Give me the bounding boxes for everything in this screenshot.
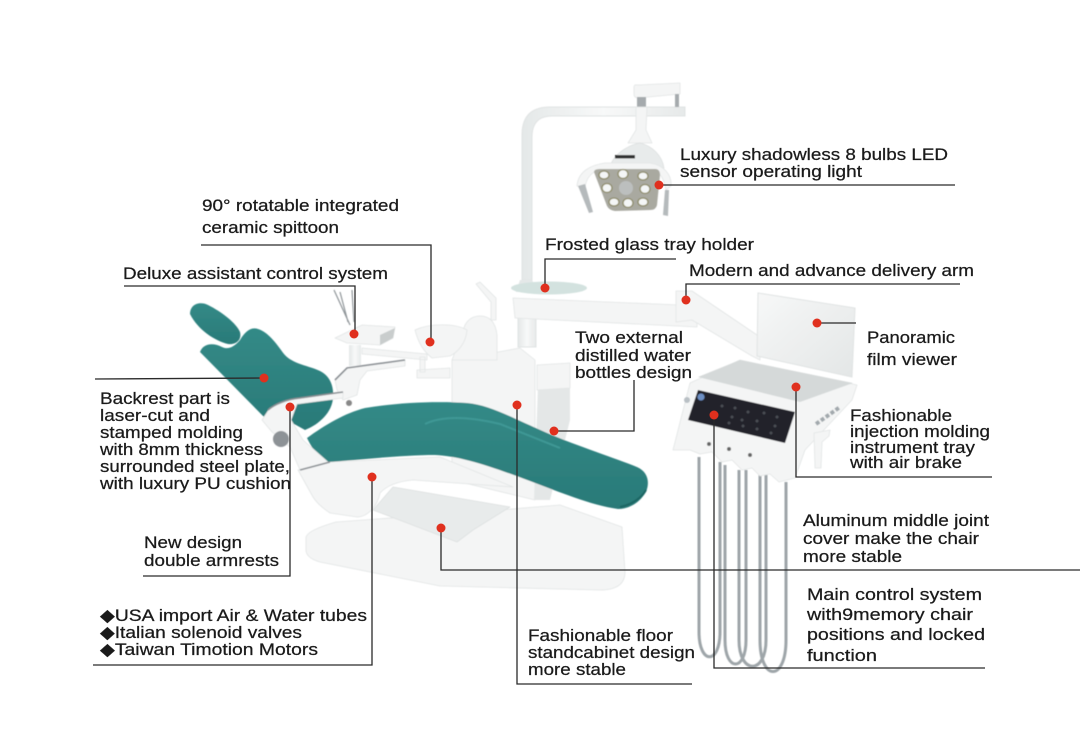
label: backrest: Backrest part is <box>100 389 230 408</box>
label: armrests: double armrests <box>144 551 279 570</box>
label: instrument tray <box>849 406 990 472</box>
label: components list <box>100 606 367 659</box>
label: water bottles <box>575 328 692 382</box>
label: backrest: laser-cut and <box>100 406 210 425</box>
label: operating light: Luxury shadowless 8 bulbs LED <box>680 145 948 164</box>
leader: armrests <box>143 402 294 576</box>
label: operating light <box>680 145 948 181</box>
label: glass tray: Frosted glass tray holder <box>545 235 754 254</box>
spittoon and faucet <box>415 282 497 360</box>
label: water bottles: Two external <box>575 328 683 347</box>
leader: main control <box>710 410 985 668</box>
leader: glass tray <box>540 259 676 292</box>
frosted glass tray <box>511 282 587 294</box>
label: main control: positions and locked <box>807 625 985 644</box>
label: backrest: surrounded steel plate, <box>100 457 290 476</box>
label: main control: function <box>807 646 877 665</box>
label: backrest <box>99 389 291 493</box>
label: middle joint: Aluminum middle joint <box>803 511 989 530</box>
instrument tray <box>673 360 857 482</box>
label: instrument tray: injection molding <box>850 422 990 441</box>
label: middle joint: more stable <box>803 547 902 566</box>
hoses <box>699 457 786 672</box>
label: middle joint: cover make the chair <box>803 529 979 548</box>
label: water bottles: distilled water <box>575 346 691 365</box>
label: backrest: with 8mm thickness <box>99 440 263 459</box>
label: delivery arm: Modern and advance delivery arm <box>689 261 974 280</box>
leader: water bottles <box>550 380 634 436</box>
label: main control <box>806 585 985 665</box>
label: main control: Main control system <box>807 585 982 604</box>
floor cabinet and bottles <box>452 348 570 500</box>
chair base <box>298 457 625 590</box>
operating light arm <box>516 83 685 292</box>
leader: operating light <box>654 180 955 190</box>
label: assistant control: Deluxe assistant control system <box>123 264 388 283</box>
label: instrument tray: Fashionable <box>850 406 952 425</box>
label: floor cabinet: Fashionable floor <box>528 626 673 645</box>
label: middle joint <box>803 511 989 566</box>
leader: instrument tray <box>792 382 992 477</box>
label: floor cabinet: standcabinet design <box>528 643 695 662</box>
leader: backrest <box>95 374 268 382</box>
leader: assistant control <box>124 286 358 338</box>
leader: floor cabinet <box>512 400 692 684</box>
label: main control: with9memory chair <box>806 605 973 624</box>
label: floor cabinet <box>528 626 695 679</box>
leader: delivery arm <box>682 284 960 304</box>
label: instrument tray: instrument tray <box>850 438 976 457</box>
leader: spittoon <box>201 245 434 346</box>
label: backrest: with luxury PU cushion <box>99 474 291 493</box>
label: film viewer: Panoramic <box>867 328 956 347</box>
label: components list: ◆USA import Air & Water tubes <box>100 606 367 625</box>
label: spittoon: 90° rotatable integrated <box>202 196 399 215</box>
label: components list: ◆Taiwan Timotion Motors <box>100 640 318 659</box>
label: spittoon <box>202 196 399 237</box>
operating light head <box>577 143 671 216</box>
label: water bottles: bottles design <box>575 363 692 382</box>
illustration: dental unit <box>190 83 857 672</box>
label: floor cabinet: more stable <box>528 660 626 679</box>
leader: film viewer <box>812 318 856 328</box>
panoramic film viewer <box>757 293 855 377</box>
label: armrests <box>144 533 279 570</box>
label: backrest: stamped molding <box>100 423 243 442</box>
assistant control tray <box>334 290 450 378</box>
label: instrument tray: with air brake <box>849 453 962 472</box>
chair upholstery <box>190 303 648 509</box>
leader: components <box>93 472 376 665</box>
label: armrests: New design <box>144 533 242 552</box>
label: components list: ◆Italian solenoid valves <box>100 623 302 642</box>
label: spittoon: ceramic spittoon <box>202 218 339 237</box>
label: film viewer <box>867 328 957 369</box>
leader: middle joint <box>436 524 1080 570</box>
label: film viewer: film viewer <box>867 350 957 369</box>
delivery arm <box>513 291 760 360</box>
armrests <box>262 360 405 470</box>
label: operating light: sensor operating light <box>680 162 862 181</box>
